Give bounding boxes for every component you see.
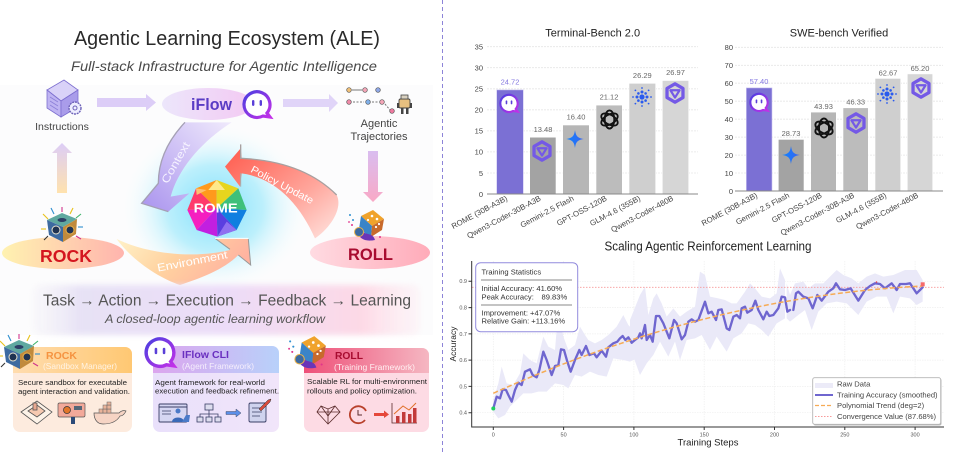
legend: Convergence Value (87.68%) — [837, 412, 937, 421]
chart: Terminal-Bench 2.0: 10 — [475, 148, 483, 157]
chart: Terminal-Bench 2.0: 30 — [475, 64, 483, 72]
x tick labels: 0 — [492, 432, 495, 438]
y tick labels: 0.7 — [459, 332, 467, 338]
arrow: iFlow card — [226, 409, 241, 417]
card: iFlow CLI — [146, 339, 279, 432]
chart: SWE-bench Verified: 50 — [725, 97, 733, 106]
arrow: environment: Environment — [156, 249, 229, 275]
chart title: SWE-bench Verified — [790, 28, 888, 40]
rotated labels: Gemini-2.5 Flash — [734, 191, 791, 227]
bars — [746, 74, 933, 191]
x tick labels: 100 — [629, 432, 638, 438]
icon: server and gear — [58, 403, 85, 424]
y tick labels — [459, 279, 467, 417]
value labels: 62.67 — [879, 68, 897, 78]
rotated labels: GLM-4.6 (355B) — [834, 191, 888, 225]
x tick labels: 50 — [561, 432, 567, 438]
card: ROCK: Secure sandbox for executable — [18, 378, 127, 387]
smoothed accuracy line — [493, 283, 923, 408]
legend: Training Accuracy (smoothed) — [837, 390, 938, 400]
icon: network heart — [317, 406, 340, 424]
value labels: 28.73 — [782, 129, 800, 138]
training statistics box — [476, 263, 578, 332]
chart: SWE-bench Verified: 80 — [725, 43, 733, 52]
axes — [468, 261, 944, 430]
chart: SWE-bench Verified: 70 — [725, 61, 733, 70]
chart: Scaling Agentic Reinforcement Learning — [448, 240, 944, 449]
rotated labels: ROME (30B-A3B) — [700, 191, 759, 228]
chart: Terminal-Bench 2.0 — [450, 28, 698, 240]
ROME gem — [187, 180, 247, 237]
rotated labels: Gemini-2.5 Flash — [519, 194, 575, 230]
card: ROLL: ROLL — [335, 350, 364, 362]
arrow: iFlow to trajectories — [283, 94, 338, 112]
value labels: 16.40 — [567, 112, 585, 122]
icon: document and rocket — [249, 399, 271, 422]
value labels — [750, 64, 929, 138]
arrow: instructions to iFlow — [97, 94, 156, 111]
value labels: 57.40 — [750, 77, 768, 86]
ROCK node: ROCK — [40, 246, 92, 266]
rotated labels: GLM-4.6 (355B) — [588, 194, 642, 228]
chart: Terminal-Bench 2.0: 0 — [479, 190, 483, 199]
x tick labels: 300 — [911, 432, 920, 438]
logos — [500, 84, 683, 160]
x tick labels: 200 — [770, 432, 779, 438]
rotated labels: ROME (30B-A3B) — [450, 194, 509, 231]
rotated labels: Qwen3-Coder-30B-A3B — [779, 191, 856, 237]
value labels: 26.97 — [666, 68, 685, 77]
icon: agentic trajectories — [347, 88, 412, 114]
y tick labels: 0.4 — [459, 411, 467, 417]
end marker — [921, 282, 925, 286]
chart: SWE-bench Verified: 40 — [725, 115, 733, 124]
icon: growth chart — [392, 403, 417, 423]
arrow: context: Context — [160, 140, 193, 186]
arrow: environment — [117, 238, 251, 285]
chart: Terminal-Bench 2.0: 5 — [479, 169, 483, 178]
label: agentic trajectories: Agentic — [361, 118, 397, 130]
chart: SWE-bench Verified: 30 — [725, 133, 733, 142]
card: ROLL: Scalable RL for multi-environment — [307, 377, 428, 386]
chart: SWE-bench Verified: 60 — [725, 79, 733, 88]
legend — [813, 378, 942, 426]
chart: SWE-bench Verified: 10 — [725, 169, 733, 178]
icon: docker whale — [94, 402, 126, 424]
arrow: policy update: Policy Update — [249, 165, 315, 207]
iFlow node — [162, 88, 270, 120]
value labels — [501, 68, 685, 134]
ROCK node — [2, 207, 124, 269]
training statistics box: Improvement: +47.07% — [482, 309, 560, 318]
card: iFlow CLI: execution and feedback refinement. — [155, 386, 279, 396]
card: iFlow CLI: Agent framework for real-world — [155, 378, 265, 387]
rotated labels: GPT-OSS-120B — [770, 191, 823, 225]
rotated labels — [450, 194, 675, 240]
chart title: Terminal-Bench 2.0 — [545, 28, 640, 40]
value labels: 21.12 — [600, 93, 618, 102]
card: ROCK — [0, 334, 132, 432]
y axis title: Accuracy — [448, 326, 458, 361]
x tick labels — [492, 432, 920, 438]
workflow band: Task → Action → Execution → Feedback → Learning — [43, 292, 411, 310]
ROME gem: ROME — [194, 201, 238, 215]
diagram core arrows and ROME — [117, 122, 338, 285]
chart: SWE-bench Verified: 0 — [729, 187, 733, 196]
ROLL node: ROLL — [348, 245, 393, 264]
polynomial trend — [493, 286, 923, 393]
legend: Raw Data — [837, 380, 871, 388]
arrow: context — [142, 122, 232, 212]
icon: hierarchy — [197, 404, 221, 422]
training statistics box: Initial Accuracy: 41.60% — [482, 284, 562, 293]
panel: ALE ecosystem diagram — [0, 28, 433, 432]
arrow: ROLL card — [374, 410, 389, 418]
chart title: Scaling Agentic Reinforcement Learning — [604, 240, 812, 254]
subtitle: Full-stack Infrastructure for Agentic Intelligence — [71, 58, 377, 74]
value labels: 26.29 — [633, 71, 652, 80]
y tick labels: 0.5 — [459, 384, 467, 390]
iFlow node: iFlow — [191, 95, 233, 114]
chart: Terminal-Bench 2.0: 35 — [475, 42, 483, 52]
training statistics box: Training Statistics — [482, 267, 541, 276]
training statistics box: 89.83% — [542, 292, 568, 301]
workflow band: A closed-loop agentic learning workflow — [104, 312, 326, 326]
y tick labels: 0.8 — [459, 306, 467, 312]
peak marker — [876, 281, 877, 283]
icon: developer window — [159, 404, 190, 422]
ROLL node — [310, 210, 430, 269]
value labels: 43.93 — [814, 102, 833, 111]
title: Agentic Learning Ecosystem (ALE) — [74, 28, 380, 50]
bars — [497, 80, 689, 194]
rotated labels: GPT-OSS-120B — [555, 194, 608, 228]
y tick labels: 0.6 — [459, 358, 467, 364]
card: ROCK: (Sandbox Manager) — [43, 361, 117, 371]
x axis title: Training Steps — [678, 438, 739, 449]
card: ROLL — [288, 336, 429, 432]
card: ROLL: (Training Framework) — [334, 362, 415, 372]
arrow: trajectories to ROLL — [363, 151, 383, 202]
vertical divider — [442, 0, 444, 454]
card: iFlow CLI: (Agent Framework) — [182, 361, 254, 371]
card: iFlow CLI: IFlow CLI — [182, 349, 229, 361]
x tick labels: 150 — [700, 432, 709, 438]
value labels: 65.20 — [911, 64, 929, 73]
chart: Terminal-Bench 2.0: 15 — [475, 127, 483, 136]
raw data band — [493, 268, 923, 418]
icon: clock cycle — [350, 406, 366, 423]
chart: Terminal-Bench 2.0: 25 — [475, 85, 483, 94]
logos — [750, 79, 929, 164]
card: ROLL: rollouts and policy optimization. — [307, 386, 417, 396]
legend: Polynomial Trend (deg=2) — [837, 401, 925, 410]
arrow: policy update — [225, 144, 338, 238]
chart: SWE-bench Verified — [700, 28, 943, 237]
rotated labels: Qwen3-Coder-480B — [609, 194, 675, 234]
rotated labels — [700, 191, 920, 237]
icon: sandbox — [21, 401, 52, 424]
y tick labels: 0.9 — [459, 279, 467, 285]
chart: SWE-bench Verified: 20 — [725, 151, 733, 160]
workflow band — [33, 285, 420, 335]
rotated labels: Qwen3-Coder-480B — [854, 191, 920, 231]
rotated labels: Qwen3-Coder-30B-A3B — [466, 194, 542, 240]
convergence line — [472, 286, 944, 288]
card: ROCK: ROCK — [46, 350, 77, 362]
value labels: 24.72 — [501, 78, 519, 86]
start marker — [491, 406, 495, 410]
label: agentic trajectories: Trajectories — [350, 131, 408, 143]
chart: Terminal-Bench 2.0: 20 — [475, 106, 483, 115]
training statistics box: Peak Accuracy: — [482, 292, 534, 301]
training statistics box: Relative Gain: +113.16% — [482, 317, 565, 326]
arrow: instructions return — [52, 143, 72, 193]
value labels: 46.33 — [846, 98, 865, 106]
x tick labels: 250 — [840, 432, 849, 438]
card: ROCK: agent interaction and validation. — [18, 387, 130, 396]
icon: instructions cube — [47, 80, 81, 117]
label: instructions: Instructions — [35, 121, 89, 133]
value labels: 13.48 — [534, 125, 552, 134]
